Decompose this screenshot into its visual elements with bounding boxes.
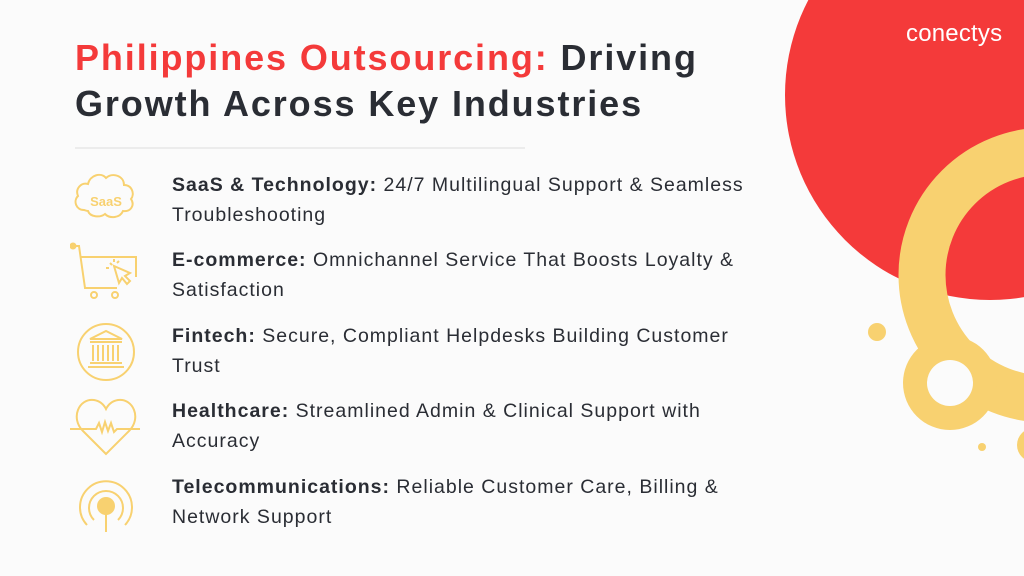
title	[75, 37, 698, 124]
icon: heart	[70, 398, 140, 456]
icon: antenna	[79, 480, 133, 532]
item: fintech: Fintech: Secure, Compliant Helpdesks Building Customer	[172, 325, 729, 347]
item: fintech	[172, 325, 729, 377]
item: ecommerce	[172, 249, 734, 301]
logo: conectys	[906, 20, 1002, 47]
item: telecom: Telecommunications: Reliable Customer Care, Billing &	[172, 476, 719, 498]
item: fintech: Trust	[172, 355, 221, 377]
item: saas: Troubleshooting	[172, 204, 326, 226]
item: healthcare: Healthcare: Streamlined Admin & Clinical Support with	[172, 400, 701, 422]
icon: bank	[77, 323, 135, 381]
item: healthcare: Accuracy	[172, 430, 260, 452]
icon: saas cloud: SaaS	[90, 194, 122, 209]
item: healthcare	[172, 400, 701, 452]
item: ecommerce: E-commerce: Omnichannel Service That Boosts Loyalty &	[172, 249, 734, 271]
title: Growth Across Key Industries	[75, 83, 643, 124]
item: ecommerce: Satisfaction	[172, 279, 285, 301]
item: saas	[172, 174, 744, 226]
icon: cart	[70, 242, 137, 299]
item: saas: SaaS & Technology: 24/7 Multilingual Support & Seamless	[172, 174, 744, 196]
icon: saas cloud	[74, 174, 134, 218]
item: telecom	[172, 476, 719, 528]
item: telecom: Network Support	[172, 506, 332, 528]
title: Philippines Outsourcing: Driving	[75, 37, 698, 78]
